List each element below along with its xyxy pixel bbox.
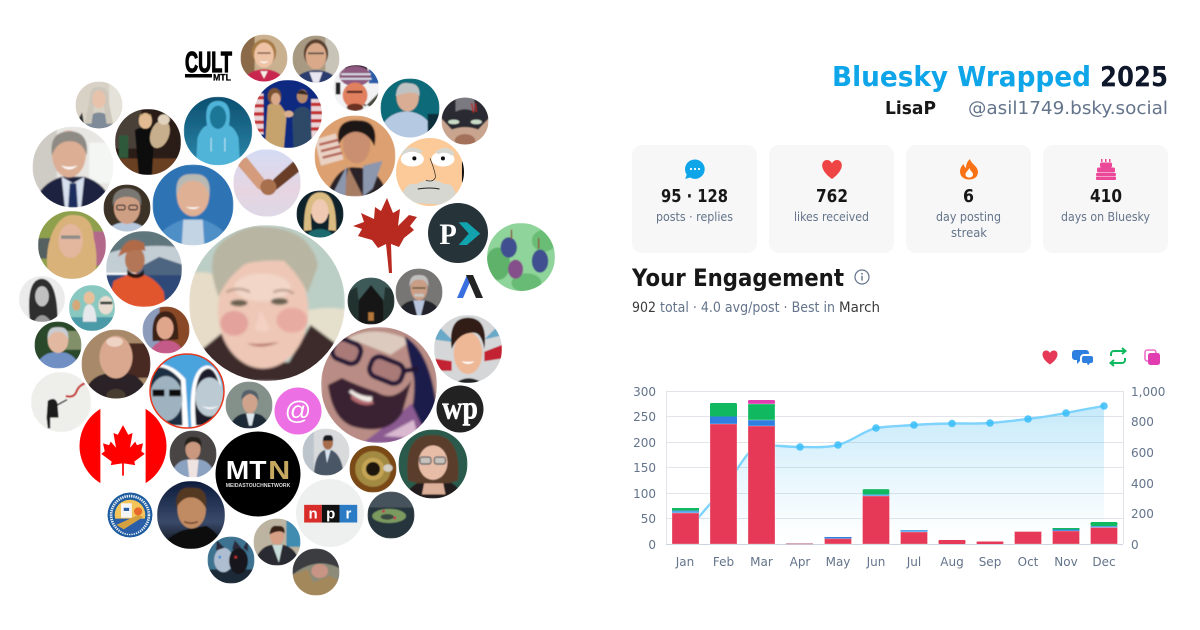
cumulative line <box>685 406 1104 533</box>
icon: replies <box>1072 350 1093 366</box>
logo: round beach club badge <box>108 492 152 538</box>
stat label: days on Bluesky <box>1061 209 1151 224</box>
stat label <box>936 209 1001 240</box>
avatar: woman with flag background <box>434 315 502 383</box>
bar: Sep <box>976 542 1004 544</box>
right axis labels: 1,000 <box>1131 385 1165 399</box>
avatar: man in grey suit by columns <box>302 428 350 476</box>
avatar: older man smiling, blue shirt <box>34 322 82 368</box>
logo: NPR <box>296 479 364 547</box>
month labels: Jun <box>866 555 885 569</box>
avatar: clasped hands <box>233 149 303 217</box>
logo: P publication <box>428 203 488 263</box>
stat value: 95 · 128 <box>661 186 728 207</box>
right axis labels <box>1131 385 1165 552</box>
left axis labels: 200 <box>633 436 656 450</box>
panel: likes received <box>769 145 894 253</box>
stat cards <box>632 145 1168 253</box>
avatar: well groomed man with denim suit <box>170 430 216 478</box>
logo: MeidasTouch Network <box>216 432 300 516</box>
bar: Dec <box>1090 522 1118 544</box>
avatar: blonde woman on dark background <box>296 190 344 238</box>
engagement summary: total · 4.0 avg/post · Best in <box>660 300 835 316</box>
avatar: bald man in dark shirt <box>82 330 150 403</box>
stat label: posts · replies <box>656 209 733 224</box>
bar: Aug <box>938 540 966 544</box>
left axis labels: 250 <box>633 410 656 424</box>
logo: at sign <box>274 388 322 434</box>
left axis labels <box>633 385 656 552</box>
month labels: Jul <box>906 555 921 569</box>
logo: Cult MTL: CULT <box>185 47 232 79</box>
avatar: man with glasses, navy blazer <box>292 36 340 82</box>
chart legend icons <box>1043 348 1160 366</box>
right axis labels: 800 <box>1131 415 1154 429</box>
avatar bubble cluster <box>19 34 556 596</box>
right axis labels: 600 <box>1131 446 1154 460</box>
logo: Washington Post wp <box>436 386 484 432</box>
avatar: bald cartoon character <box>396 138 464 206</box>
avatar: bearded man in orange jacket, mountain lake <box>106 231 182 307</box>
logo: NPR: n <box>308 505 318 522</box>
avatar: older man in dark suit, map background <box>226 382 272 428</box>
stat value: 6 <box>963 186 974 207</box>
icon: heart <box>822 160 842 179</box>
avatar: couple shaking hands in front of US flag <box>254 80 322 148</box>
right axis labels: 400 <box>1131 477 1154 491</box>
avatar: smiling man with dark glasses, purple tones <box>321 327 439 443</box>
grid lines <box>666 391 1124 544</box>
bar: Mar <box>748 400 775 544</box>
title: Bluesky Wrapped <box>832 60 1091 93</box>
avatar: central profile portrait <box>189 225 345 381</box>
line markers <box>796 402 1108 451</box>
bar: Jan <box>672 508 699 544</box>
icon: flame <box>960 159 978 180</box>
month labels: Jan <box>675 555 694 569</box>
avatar: man in navy suit <box>32 126 114 208</box>
stat value: 410 <box>1090 186 1122 207</box>
logo: MeidasTouch Network: MT <box>226 455 267 485</box>
month labels: Dec <box>1092 555 1116 569</box>
avatar: woman in pink jacket <box>240 34 288 82</box>
avatar: close-up of an eye <box>350 446 396 492</box>
handle: @asil1749.bsky.social <box>968 98 1168 119</box>
bar: May <box>824 537 852 544</box>
logo: Washington Post wp: wp <box>442 390 478 426</box>
title: 2025 <box>1100 60 1168 93</box>
stat label: day posting <box>936 209 1001 224</box>
icon: likes <box>1043 350 1057 364</box>
avatar: black and white fantasy wolves <box>208 536 254 584</box>
avatar: black and white portrait of woman <box>19 276 65 322</box>
avatar: blonde woman in grey top <box>76 82 122 128</box>
bar: Feb <box>710 403 737 544</box>
stat label: likes received <box>794 209 869 224</box>
avatar: dark haired man with cash <box>314 116 396 196</box>
stacked bars <box>672 400 1118 544</box>
logo: P publication: P <box>439 218 457 251</box>
avatar: hooded figure in fur <box>292 548 340 596</box>
avatar: dark forest cabin <box>348 278 394 324</box>
avatar: man in front of night city <box>157 481 225 549</box>
stat label: streak <box>951 225 988 240</box>
engagement summary: 902 <box>632 300 656 316</box>
heading: your engagement: Your Engagement <box>631 264 844 292</box>
avatar: grey haired man in blue shirt, teal wall <box>380 78 440 138</box>
logo: MeidasTouch Network: MEIDASTOUCHNETWORK <box>226 483 290 489</box>
panel: posts and replies <box>632 145 757 253</box>
icon: info <box>855 270 869 284</box>
month labels: Oct <box>1018 555 1039 569</box>
month labels: Sep <box>979 555 1001 569</box>
avatar: faceless figure in blue hoodie <box>184 97 252 165</box>
bar: Jun <box>862 489 890 544</box>
display name: LisaP <box>885 98 936 119</box>
logo: Cult MTL: MTL <box>213 72 231 84</box>
avatar: blonde curly haired woman <box>38 211 106 279</box>
icon: reposts <box>1110 348 1126 366</box>
avatar: grape clusters on green leaves <box>486 223 556 292</box>
logo: at sign: @ <box>285 395 311 425</box>
avatar: masked woman <box>442 97 488 147</box>
avatar: man with glasses and dark hair <box>104 184 150 232</box>
avatar: cartoonish man in striped hat <box>333 65 379 111</box>
month labels: Mar <box>750 555 773 569</box>
avatar: two men with sunglasses, red ring <box>150 354 226 428</box>
avatar: woman with brown hair and floral top <box>142 306 190 354</box>
left axis labels: 100 <box>633 487 656 501</box>
cumulative area <box>685 406 1104 544</box>
month labels: Aug <box>940 555 964 569</box>
logo: MeidasTouch Network: N <box>268 455 290 485</box>
engagement summary: March <box>839 300 880 316</box>
avatar: floating lily pads on dark water <box>368 492 414 538</box>
bar: Jul <box>900 530 928 544</box>
logo: NPR: p <box>326 505 335 522</box>
left axis labels: 300 <box>633 385 656 399</box>
avatar: curly haired woman with glasses <box>398 430 468 498</box>
logo: blue and black A mark <box>457 275 483 298</box>
panel: day posting streak <box>906 145 1031 253</box>
bar: Oct <box>1014 532 1042 544</box>
avatar: man in dark suit <box>254 518 300 566</box>
left axis labels: 50 <box>641 512 656 526</box>
panel: days on Bluesky <box>1043 145 1168 253</box>
stat value: 762 <box>816 186 848 207</box>
icon: birthday cake <box>1096 159 1116 180</box>
icon: chat bubble <box>685 159 705 179</box>
header <box>832 60 1168 119</box>
icon: red maple leaf <box>353 198 417 273</box>
month labels: May <box>826 555 850 569</box>
month labels: Feb <box>713 555 734 569</box>
chart: monthly engagement <box>633 385 1165 569</box>
avatar: smiling man on blue background <box>152 164 234 246</box>
logo: NPR: r <box>345 505 351 522</box>
bar: Apr <box>786 543 813 544</box>
avatar: family photo in teal tones <box>69 285 115 331</box>
month labels: Nov <box>1054 555 1078 569</box>
avatar: Banksy girl with balloon <box>31 372 91 432</box>
month labels <box>675 555 1116 569</box>
icon: quotes <box>1145 350 1160 365</box>
right axis labels: 200 <box>1131 507 1154 521</box>
avatar: older man with glasses, dark suit <box>396 268 442 316</box>
left axis labels: 0 <box>648 538 656 552</box>
bar: Nov <box>1052 528 1080 544</box>
right axis labels: 0 <box>1131 538 1139 552</box>
avatar: woman in black holding a dog <box>115 109 181 175</box>
avatar: Canadian flag <box>80 402 166 490</box>
logo: Cult MTL <box>185 47 232 84</box>
month labels: Apr <box>790 555 810 569</box>
left axis labels: 150 <box>633 461 656 475</box>
